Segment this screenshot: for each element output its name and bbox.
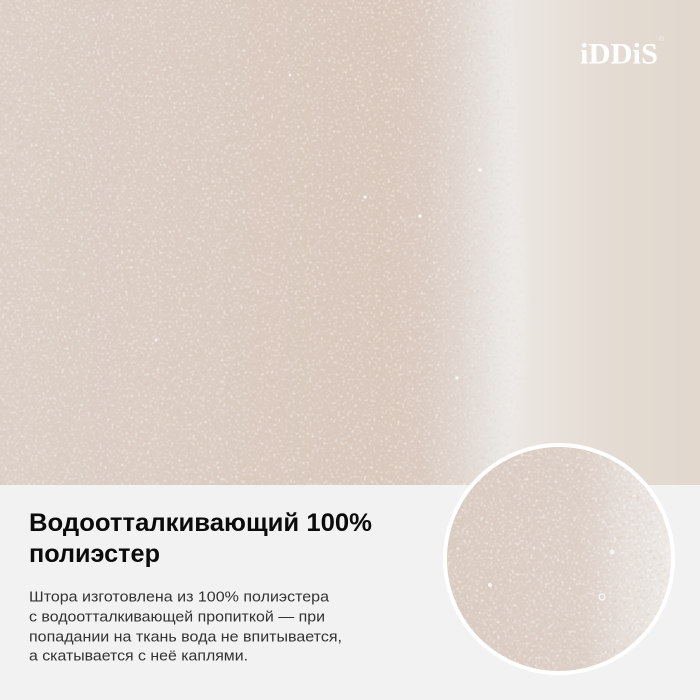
water droplets on fabric: [155, 74, 482, 380]
magnified fabric circle: [445, 445, 673, 673]
description text: [29, 590, 342, 664]
heading: Водоотталкивающий 100%: [29, 509, 372, 537]
panel: text background: [0, 485, 700, 700]
panel: fabric photo: [0, 0, 700, 505]
description text: с водоотталкивающей пропиткой — при: [29, 610, 325, 626]
logo: iDDiS: ®: [659, 35, 665, 43]
logo: iDDiS: iDDiS: [580, 38, 658, 70]
heading: полиэстер: [29, 540, 160, 568]
description text: Штора изготовлена из 100% полиэстера: [29, 590, 330, 606]
description text: а скатывается с неё каплями.: [29, 648, 248, 664]
heading: [29, 509, 372, 568]
description text: попадании на ткань вода не впитывается,: [29, 630, 342, 646]
